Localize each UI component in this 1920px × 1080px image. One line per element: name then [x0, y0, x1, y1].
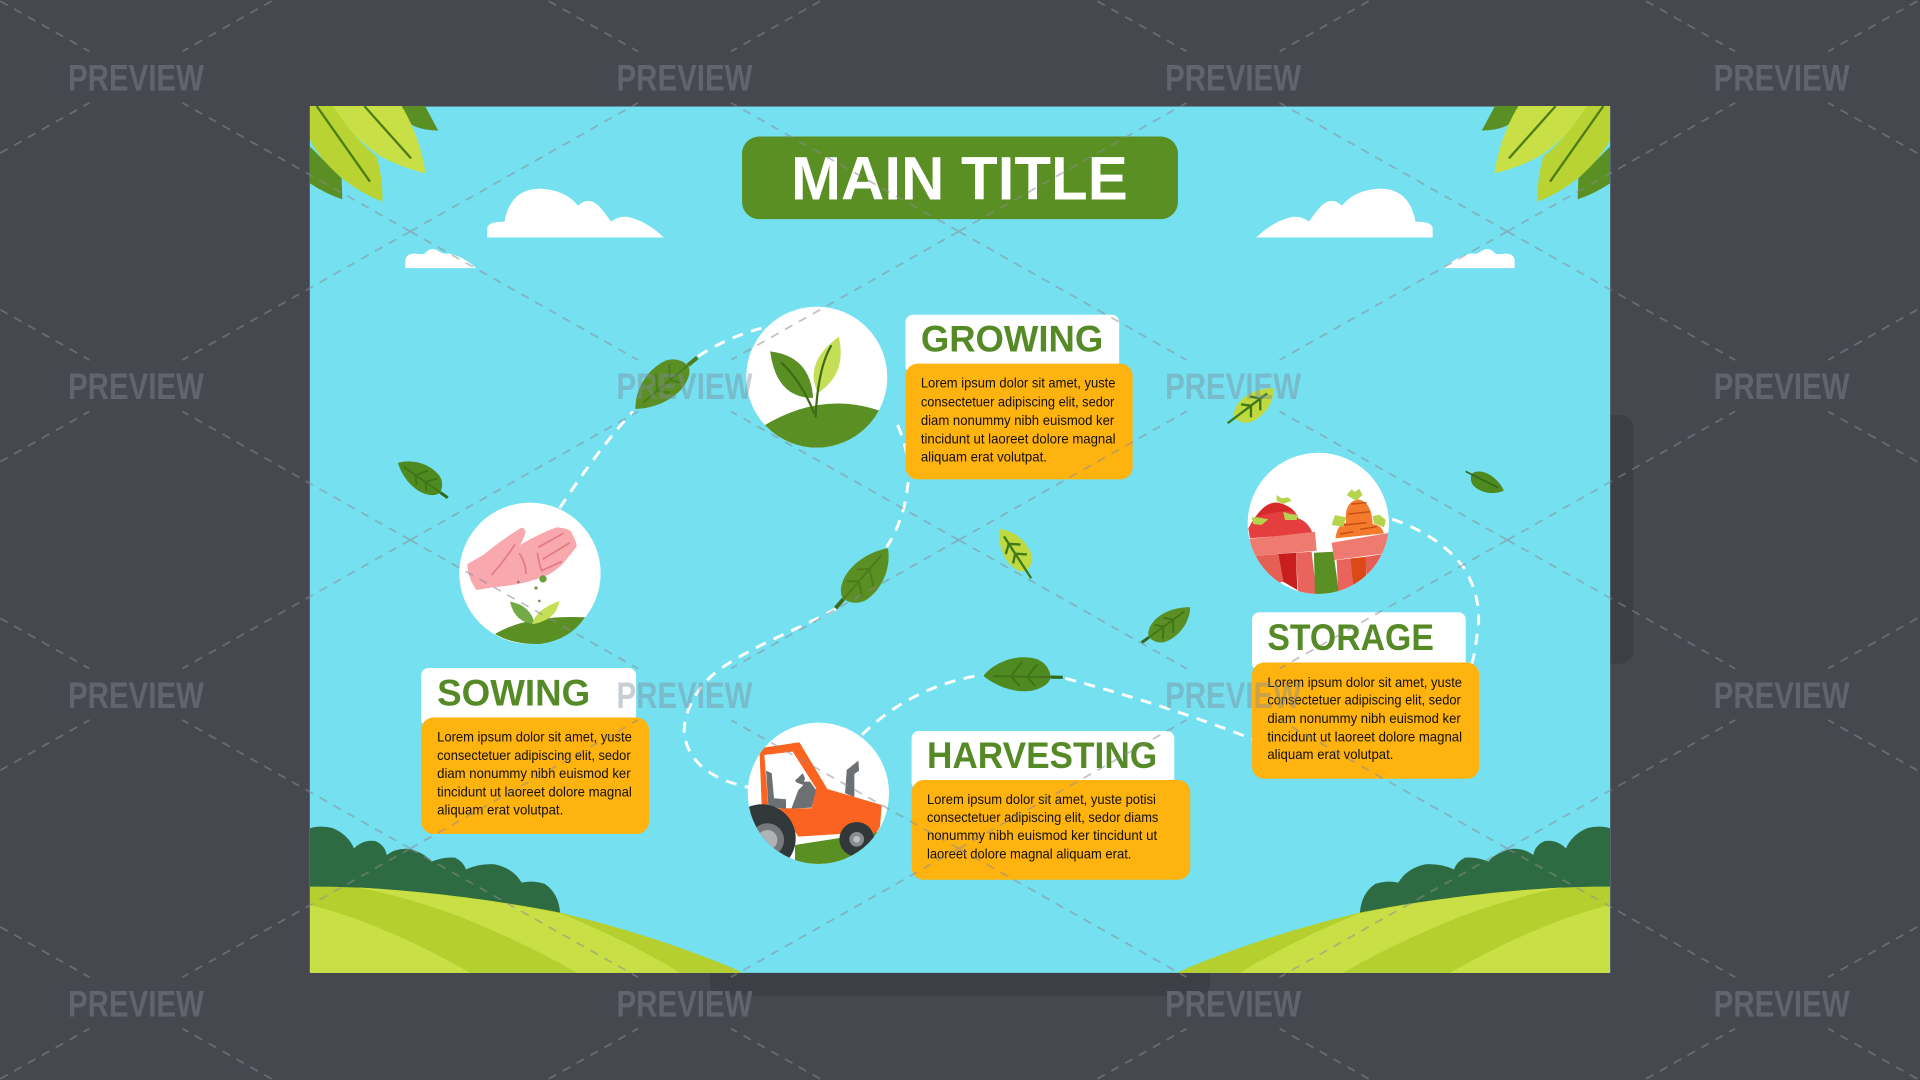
watermark labels: PREVIEW — [68, 366, 204, 407]
cloud: large left — [487, 189, 664, 238]
panel: storage: consectetuer adipiscing elit, sedor — [1267, 692, 1461, 708]
watermark labels: PREVIEW — [617, 675, 753, 716]
floating leaf: left — [392, 451, 456, 507]
floating leaf: on path to growing — [623, 342, 707, 420]
panel: growing: consectetuer adipiscing elit, sedor — [921, 394, 1115, 410]
floating leaf: light centre — [990, 521, 1043, 584]
panel: sowing: consectetuer adipiscing elit, sedor — [437, 747, 631, 763]
panel: sowing — [421, 668, 649, 834]
panel: storage: Lorem ipsum dolor sit amet, yuste — [1267, 674, 1462, 690]
title banner: MAIN TITLE — [791, 145, 1128, 213]
panel: storage — [1252, 612, 1479, 779]
panel: growing: diam nonummy nibh euismod ker — [921, 412, 1115, 428]
left hill and bushes — [310, 827, 743, 973]
watermark labels: PREVIEW — [1165, 675, 1301, 716]
bottom shadow tab — [710, 955, 1210, 996]
icon: growing sprout — [746, 307, 894, 453]
panel: growing: Lorem ipsum dolor sit amet, yuste — [921, 375, 1116, 391]
cloud: large right — [1256, 189, 1433, 238]
panel: growing: aliquam erat volutpat. — [921, 449, 1047, 465]
icon: storage crates — [1247, 453, 1390, 595]
top left corner leaves — [310, 106, 438, 202]
watermark labels: PREVIEW — [68, 983, 204, 1024]
panel: growing — [906, 315, 1133, 479]
watermark labels: PREVIEW — [1714, 58, 1850, 99]
panel: sowing: tincidunt ut laoreet dolore magnal — [437, 784, 632, 800]
dashed journey path — [560, 328, 1479, 787]
watermark labels: PREVIEW — [68, 58, 204, 99]
cloud: small left — [405, 249, 476, 268]
watermark labels: PREVIEW — [1165, 983, 1301, 1024]
panel: harvesting: consectetuer adipiscing elit, sedor diams — [927, 809, 1158, 825]
floating leaf: centre large — [825, 539, 902, 621]
watermark labels: PREVIEW — [617, 58, 753, 99]
panel: harvesting: laoreet dolore magnal aliquam erat. — [927, 845, 1131, 861]
panel: sowing: aliquam erat volutpat. — [437, 801, 563, 817]
watermark labels: PREVIEW — [617, 366, 753, 407]
watermark labels: PREVIEW — [1165, 366, 1301, 407]
panel: sowing: diam nonummy nibh euismod ker — [437, 765, 631, 781]
icon: sowing hand — [459, 503, 601, 644]
panel: harvesting: Lorem ipsum dolor sit amet, yuste potisi — [927, 791, 1156, 807]
panel: storage: aliquam erat volutpat. — [1267, 746, 1393, 762]
icon: harvesting tractor — [748, 722, 889, 864]
panel: storage: STORAGE — [1267, 617, 1434, 658]
panel: sowing: Lorem ipsum dolor sit amet, yuste — [437, 728, 632, 744]
watermark labels: PREVIEW — [1714, 366, 1850, 407]
watermark labels: PREVIEW — [1714, 983, 1850, 1024]
floating leaf: right small — [1461, 464, 1507, 500]
floating leaf: light upper right — [1221, 380, 1283, 435]
top right corner leaves — [1482, 106, 1610, 202]
watermark labels: PREVIEW — [1714, 675, 1850, 716]
panel: sowing: SOWING — [437, 672, 590, 713]
title banner — [742, 137, 1178, 219]
panel: harvesting: nonummy nibh euismod ker tincidunt ut — [927, 827, 1157, 843]
floating leaf: on path near harvesting — [983, 657, 1063, 692]
right hill and bushes — [1177, 827, 1610, 973]
panel: storage: diam nonummy nibh euismod ker — [1267, 710, 1461, 726]
watermark labels: PREVIEW — [617, 983, 753, 1024]
panel: harvesting — [912, 731, 1190, 880]
panel: storage: tincidunt ut laoreet dolore magnal — [1267, 728, 1462, 744]
panel: growing: GROWING — [921, 318, 1103, 359]
panel: growing: tincidunt ut laoreet dolore magnal — [921, 430, 1116, 446]
panel: harvesting: HARVESTING — [927, 735, 1157, 776]
right shadow tab — [1592, 415, 1633, 664]
sky panel — [310, 107, 1610, 973]
floating leaf: right of centre — [1135, 598, 1199, 654]
watermark labels: PREVIEW — [1165, 58, 1301, 99]
cloud: small right — [1444, 249, 1515, 268]
watermark labels: PREVIEW — [68, 675, 204, 716]
